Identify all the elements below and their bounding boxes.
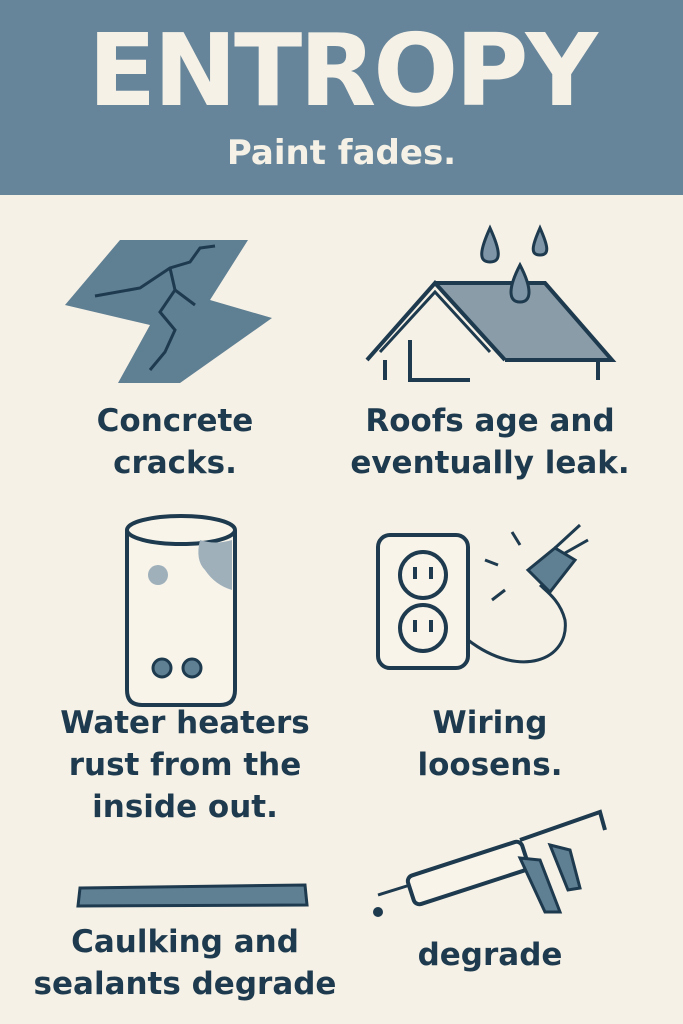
text: wiring: loosens. xyxy=(418,747,562,783)
text: roofs xyxy=(350,403,630,481)
icon: cracked concrete xyxy=(65,240,272,383)
icon: caulk gun xyxy=(373,812,605,917)
subtitle: Paint fades. xyxy=(227,133,456,173)
icon: roof xyxy=(367,228,612,380)
text: water heaters: inside out. xyxy=(92,789,278,825)
header xyxy=(0,0,683,195)
text: water heaters xyxy=(60,705,310,825)
text: wiring: Wiring xyxy=(432,705,548,741)
text: roofs: Roofs age and xyxy=(365,403,615,439)
text: caulking: Caulking and xyxy=(71,924,299,960)
text: concrete: cracks. xyxy=(113,445,237,481)
text: water heaters: Water heaters xyxy=(60,705,310,741)
title: ENTROPY xyxy=(88,12,595,129)
icon: outlet and plug xyxy=(378,525,588,668)
text: caulking: sealants degrade xyxy=(34,966,336,1002)
icon: water heater xyxy=(127,516,235,705)
text: water heaters: rust from the xyxy=(69,747,301,783)
text: roofs: eventually leak. xyxy=(350,445,630,481)
text: concrete: Concrete xyxy=(97,403,253,439)
icon: caulking strip xyxy=(78,885,307,906)
text: degrade: degrade xyxy=(418,937,562,973)
text: concrete xyxy=(97,403,253,481)
text: wiring xyxy=(418,705,562,783)
text: caulking xyxy=(34,924,336,1002)
